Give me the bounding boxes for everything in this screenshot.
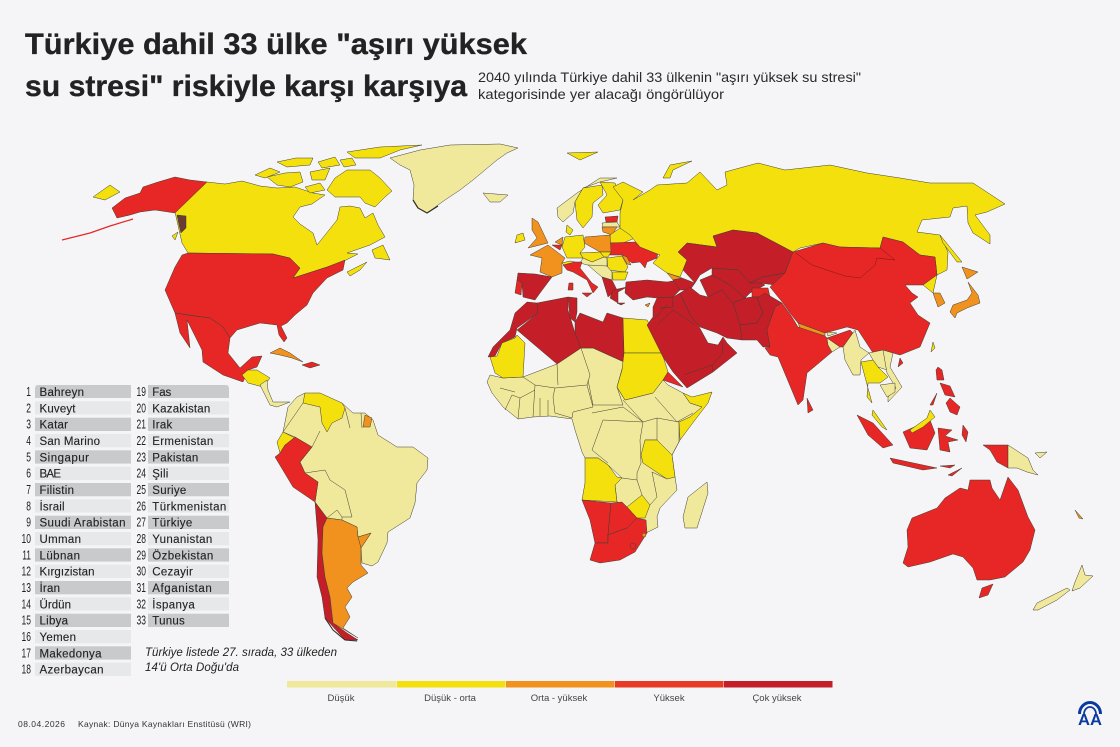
list row 6 <box>26 467 131 481</box>
list row 14: 14 <box>22 598 31 612</box>
list row 1: 1 <box>26 385 31 400</box>
region: Russia <box>613 163 1005 277</box>
list row 15 <box>22 614 131 628</box>
list row 23 <box>137 450 229 465</box>
list row 31 <box>137 581 229 596</box>
list row 25 <box>137 483 229 498</box>
list row 31: Afganistan <box>152 583 212 595</box>
list row 15: Libya <box>40 616 69 628</box>
list row 3 <box>26 418 131 432</box>
list row 4: 4 <box>26 434 31 449</box>
list row 20: Kazakistan <box>152 403 210 415</box>
list row 25: 25 <box>137 483 146 498</box>
list row 15: 15 <box>22 614 31 628</box>
list row 18: Azerbaycan <box>40 665 104 677</box>
subtitle: kategorisinde yer alacağı öngörülüyor <box>478 86 724 102</box>
list row 29: 29 <box>137 549 146 563</box>
list row 3: Katar <box>40 420 68 432</box>
list row 33: 33 <box>137 614 146 628</box>
list row 30: 30 <box>137 565 146 579</box>
list row 21: Irak <box>152 420 173 432</box>
list row 28: Yunanistan <box>152 534 212 546</box>
list row 21: 21 <box>137 418 146 432</box>
list row 22: Ermenistan <box>152 436 213 448</box>
list row 8: 8 <box>26 500 31 514</box>
region: Africa <box>487 297 712 563</box>
list row 5: 5 <box>26 451 31 465</box>
list row 10: Umman <box>40 534 81 546</box>
legend: Düşük <box>328 693 355 704</box>
list row 2: Kuveyt <box>40 403 76 415</box>
logo: Anadolu Agency: AA <box>1078 712 1102 729</box>
list row 20: 20 <box>137 402 146 416</box>
list row 21 <box>137 418 229 432</box>
note on Türkiye: 14'ü Orta Doğu'da <box>145 662 239 674</box>
region: Middle East and Central Asia <box>625 230 793 388</box>
list row 24: 24 <box>137 467 146 481</box>
list row 26: Türkmenistan <box>152 501 226 513</box>
list row 30: Cezayir <box>152 567 193 579</box>
logo: Anadolu Agency <box>1078 702 1102 729</box>
list row 20 <box>137 401 229 416</box>
list row 28 <box>137 532 229 547</box>
region: North America <box>62 144 518 407</box>
list row 6: BAE <box>40 469 61 481</box>
list row 5 <box>26 450 131 465</box>
title: su stresi" riskiyle karşı karşıya <box>25 70 467 103</box>
list row 18 <box>22 663 131 677</box>
region: Europe <box>483 152 692 307</box>
list row 13: 13 <box>22 581 31 596</box>
list row 33: Tunus <box>152 616 185 628</box>
legend: Düşük - orta <box>424 693 477 704</box>
list row 22: 22 <box>137 434 146 449</box>
list row 2: 2 <box>26 402 31 416</box>
list row 7: 7 <box>26 483 31 498</box>
list row 27: 27 <box>137 516 146 530</box>
legend <box>287 681 832 704</box>
list row 1: Bahreyn <box>40 387 84 399</box>
list row 10: 10 <box>22 532 31 547</box>
list row 7 <box>26 483 131 498</box>
country ranking list <box>22 385 229 677</box>
list row 16 <box>22 630 131 645</box>
subtitle: 2040 yılında Türkiye dahil 33 ülkenin "aşırı yüksek su stresi" <box>478 69 861 85</box>
list row 19: 19 <box>137 385 146 400</box>
list row 32 <box>137 597 229 612</box>
list row 9: Suudi Arabistan <box>40 518 126 530</box>
list row 31: 31 <box>137 581 146 596</box>
list row 14 <box>22 597 131 612</box>
list row 7: Filistin <box>40 485 74 497</box>
list row 14: Ürdün <box>40 599 71 611</box>
list row 2 <box>26 401 131 416</box>
note on Türkiye <box>145 647 337 674</box>
title <box>25 28 527 103</box>
list row 5: Singapur <box>40 452 89 464</box>
source: Kaynak: Dünya Kaynakları Enstitüsü (WRI) <box>78 719 251 729</box>
list row 4: San Marino <box>40 436 100 448</box>
list row 12: 12 <box>22 565 31 579</box>
list row 22 <box>137 434 229 449</box>
list row 6: 6 <box>26 467 31 481</box>
title: Türkiye dahil 33 ülke "aşırı yüksek <box>25 28 527 61</box>
list row 12 <box>22 565 131 579</box>
world map <box>62 144 1093 641</box>
list row 4 <box>26 434 131 449</box>
list row 9: 9 <box>26 516 31 530</box>
list row 32: 32 <box>137 598 146 612</box>
list row 17 <box>22 646 131 661</box>
footer date: 08.04.2026 <box>18 719 65 729</box>
region: South and East Asia <box>765 237 980 430</box>
list row 26: 26 <box>137 500 146 514</box>
list row 30 <box>137 565 229 579</box>
list row 17: Makedonya <box>40 648 102 660</box>
legend: Yüksek <box>653 693 685 704</box>
list row 23: Pakistan <box>152 452 198 464</box>
list row 25: Suriye <box>152 485 186 497</box>
list row 16: 16 <box>22 630 31 645</box>
list row 8: İsrail <box>40 500 64 513</box>
list row 9 <box>26 516 131 530</box>
list row 19 <box>137 385 229 400</box>
note on Türkiye: Türkiye listede 27. sırada, 33 ülkeden <box>145 647 337 659</box>
list row 3: 3 <box>26 418 31 432</box>
list row 13 <box>22 581 131 596</box>
list row 27 <box>137 516 229 530</box>
list row 12: Kırgızistan <box>40 567 94 579</box>
list row 26 <box>137 499 229 514</box>
list row 10 <box>22 532 131 547</box>
list row 27: Türkiye <box>152 518 192 530</box>
list row 24 <box>137 467 229 481</box>
region: Southeast Asia islands and Oceania <box>857 367 1093 610</box>
list row 8 <box>26 499 131 514</box>
list row 11: 11 <box>22 549 31 563</box>
list row 13: İran <box>40 582 60 595</box>
list row 32: İspanya <box>152 598 195 611</box>
legend: Orta - yüksek <box>531 693 587 704</box>
list row 17: 17 <box>22 647 31 661</box>
list row 19: Fas <box>152 387 172 399</box>
subtitle <box>478 69 861 102</box>
list row 33 <box>137 614 229 628</box>
list row 23: 23 <box>137 451 146 465</box>
legend: Çok yüksek <box>752 693 802 704</box>
list row 16: Yemen <box>40 632 76 644</box>
list row 11: Lübnan <box>40 550 80 562</box>
list row 18: 18 <box>22 663 31 677</box>
list row 28: 28 <box>137 532 146 547</box>
region: South America <box>275 393 428 641</box>
list row 11 <box>22 548 131 563</box>
list row 1 <box>26 385 131 400</box>
list row 29 <box>137 548 229 563</box>
list row 29: Özbekistan <box>152 550 213 562</box>
list row 24: Şili <box>152 469 168 481</box>
